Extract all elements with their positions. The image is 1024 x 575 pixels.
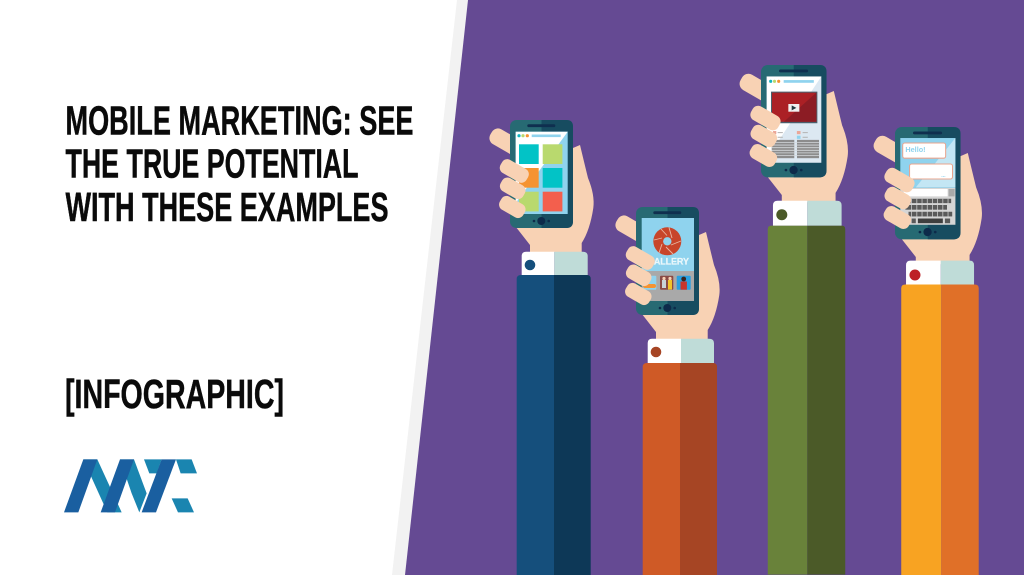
hand 4: yellow sleeve, chat phone	[871, 127, 982, 575]
phone screen: chat and keyboard	[900, 138, 955, 225]
article text blocks	[772, 140, 819, 158]
chat bubble: Hello: Hello!	[905, 145, 926, 154]
title: THE TRUE POTENTIAL	[66, 140, 358, 186]
cuff: white with green button	[773, 201, 842, 226]
subtitle: infographic tag: [INFOGRAPHIC]	[65, 371, 284, 417]
phone screen: app grid	[516, 132, 568, 214]
sleeve: rust	[643, 363, 717, 575]
title: MOBILE MARKETING: SEE	[66, 97, 414, 143]
title: WITH THESE EXAMPLES	[66, 184, 388, 230]
hand 1: navy sleeve, app grid phone	[487, 120, 594, 575]
cuff: white with red button	[906, 261, 974, 285]
phone screen: video	[767, 76, 821, 163]
sleeve: navy	[517, 275, 591, 575]
phone screen: gallery	[642, 218, 694, 301]
sleeve: amber	[901, 285, 979, 575]
logo	[64, 459, 197, 512]
sleeve: green	[768, 226, 845, 575]
cuff: white with rust button	[648, 339, 714, 363]
video player	[771, 92, 817, 123]
icon: camera aperture	[653, 227, 681, 255]
keyboard	[903, 199, 952, 223]
phone screen: gallery: GALLERY	[647, 256, 689, 266]
title	[66, 97, 414, 230]
hand 2: orange sleeve, gallery phone	[613, 207, 720, 575]
hand 3: green sleeve, video phone	[737, 65, 848, 575]
panel: purple background	[392, 0, 1024, 575]
cuff: white with navy button	[522, 252, 588, 275]
chat bubble: reply: ...	[941, 173, 946, 179]
